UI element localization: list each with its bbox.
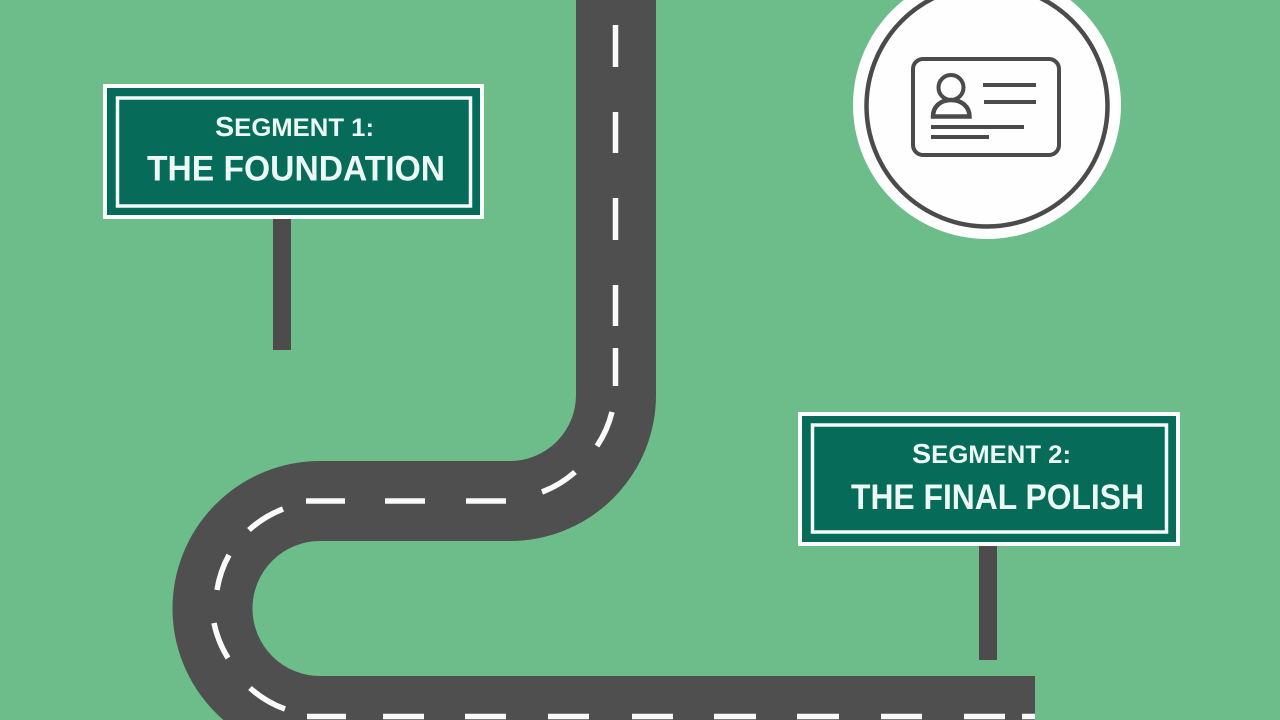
sign post 2 — [979, 546, 997, 660]
sign board 2 — [800, 414, 1178, 544]
sign 2 title: THE FINAL POLISH — [851, 478, 1144, 517]
icon: ID card — [913, 59, 1059, 155]
icon: person — [933, 75, 970, 116]
sign 2 heading: SEGMENT 2: — [912, 438, 1071, 469]
winding road — [212, 0, 1035, 716]
sign: segment 1 — [105, 86, 482, 350]
sign 1 heading: SEGMENT 1: — [215, 111, 374, 142]
road centre dashes — [214, 25, 1035, 716]
sign board 1 — [105, 86, 482, 217]
icon: card text lines — [931, 85, 1036, 137]
sign: segment 2 — [800, 414, 1178, 660]
sign post 1 — [273, 219, 291, 350]
sign 1 title: THE FOUNDATION — [147, 150, 445, 188]
icon: ID card badge — [853, 0, 1121, 239]
